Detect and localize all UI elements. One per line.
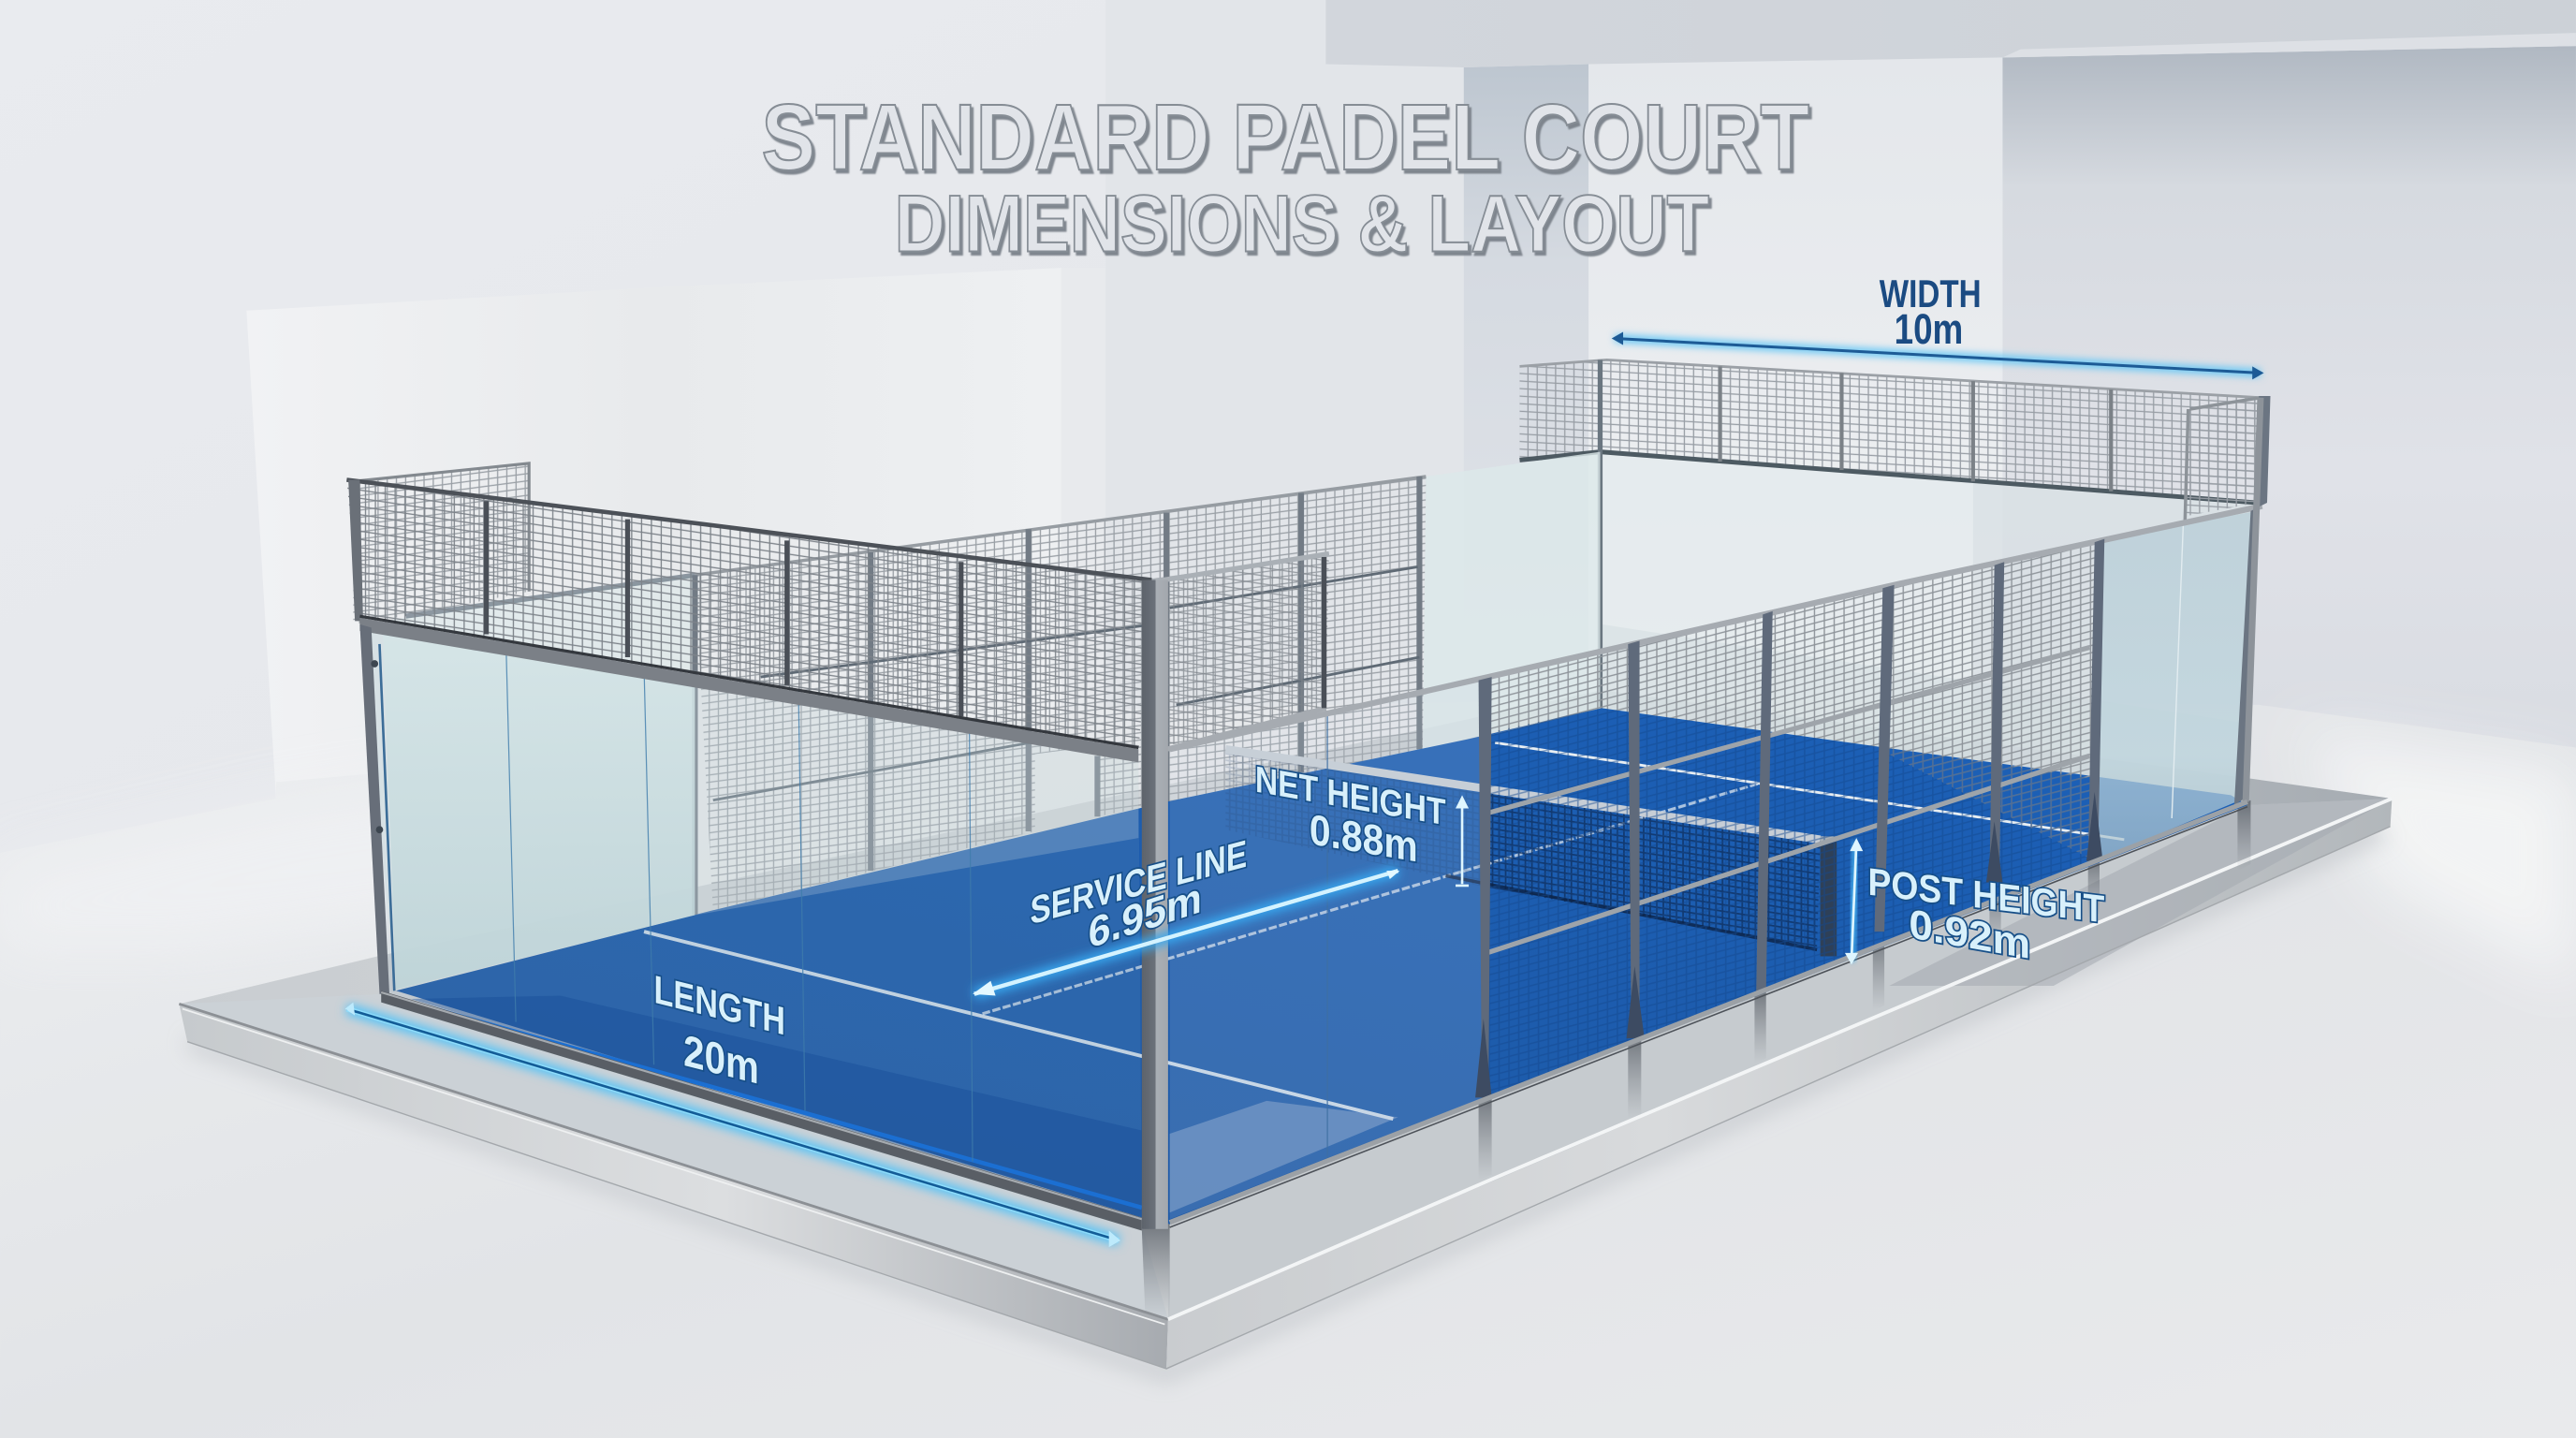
far side: mesh and glass	[353, 452, 1600, 990]
label: length: 20m	[683, 1025, 759, 1094]
net	[1225, 749, 1837, 956]
arrow: service line	[973, 871, 1399, 996]
arrow: length 20m	[345, 1003, 1120, 1247]
arrow: post height	[1845, 838, 1863, 964]
title: STANDARD PADEL COURT	[762, 85, 1809, 190]
label: net height: NET HEIGHT	[1255, 759, 1445, 833]
back wall: glass and mesh	[1519, 360, 2261, 799]
label: post height: POST HEIGHT	[1868, 860, 2104, 931]
floor shadow	[187, 822, 2391, 1384]
arrow: width 10m	[1612, 332, 2263, 379]
label: net height: 0.88m	[1310, 804, 1418, 871]
label: length: LENGTH	[654, 967, 785, 1044]
label: service line: SERVICE LINE	[1030, 831, 1247, 932]
title	[762, 85, 1809, 270]
label: post height: 0.92m	[1909, 902, 2030, 968]
court surface	[396, 708, 2247, 1224]
label: width: WIDTH	[1880, 271, 1982, 315]
title: DIMENSIONS & LAYOUT	[895, 180, 1709, 270]
platform base	[179, 690, 2392, 1369]
return panel at front corner	[1153, 553, 1329, 749]
side wall: mesh, rails, posts	[1170, 396, 2271, 1227]
label: width: 10m	[1895, 305, 1963, 353]
label: length	[654, 967, 785, 1094]
label: width	[1880, 271, 1982, 353]
label: service line: 6.95m	[1089, 873, 1202, 958]
label: post height	[1868, 860, 2104, 968]
arrow: net height	[1456, 795, 1469, 886]
front end wall: glass, mesh, posts	[346, 479, 1168, 1231]
label: net height	[1255, 759, 1445, 871]
court lines	[644, 742, 2124, 1119]
label: service line	[1030, 831, 1247, 958]
